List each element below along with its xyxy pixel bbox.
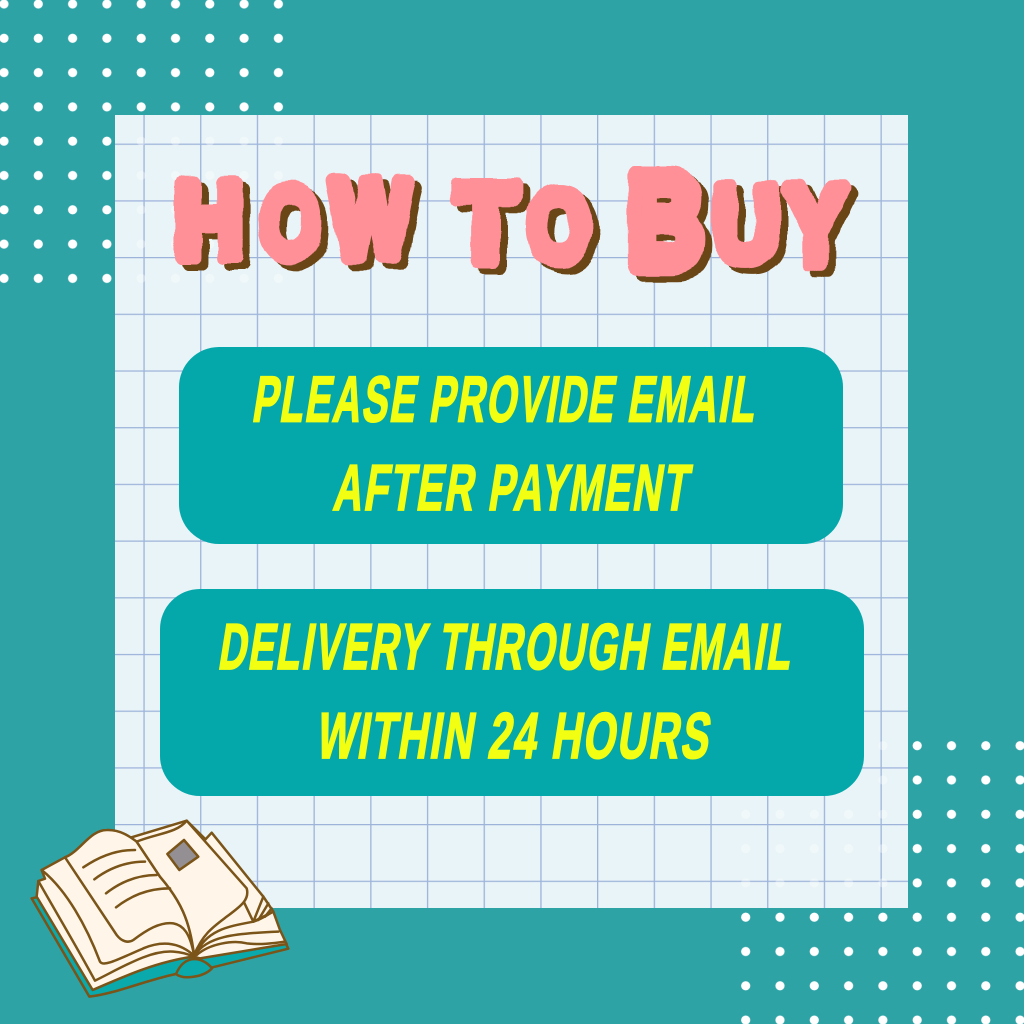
panel: delivery <box>160 589 864 796</box>
title: H <box>175 159 243 280</box>
title: O <box>260 167 320 278</box>
icon: book picture <box>167 840 198 870</box>
title: W <box>332 157 410 281</box>
title: B <box>628 146 702 294</box>
title: T <box>456 164 516 286</box>
title <box>175 146 846 294</box>
text: after payment: AFTER PAYMENT <box>330 451 697 524</box>
title: Y <box>786 165 846 288</box>
dots: bottom right <box>729 729 1024 1024</box>
text: within 24 hours: WITHIN 24 HOURS <box>313 699 718 772</box>
dots: top left <box>0 0 296 296</box>
panel: provide email <box>179 347 843 544</box>
panel: grid paper <box>115 115 908 908</box>
icon: open book <box>32 821 288 997</box>
title: O <box>528 171 590 282</box>
title: U <box>713 165 779 283</box>
